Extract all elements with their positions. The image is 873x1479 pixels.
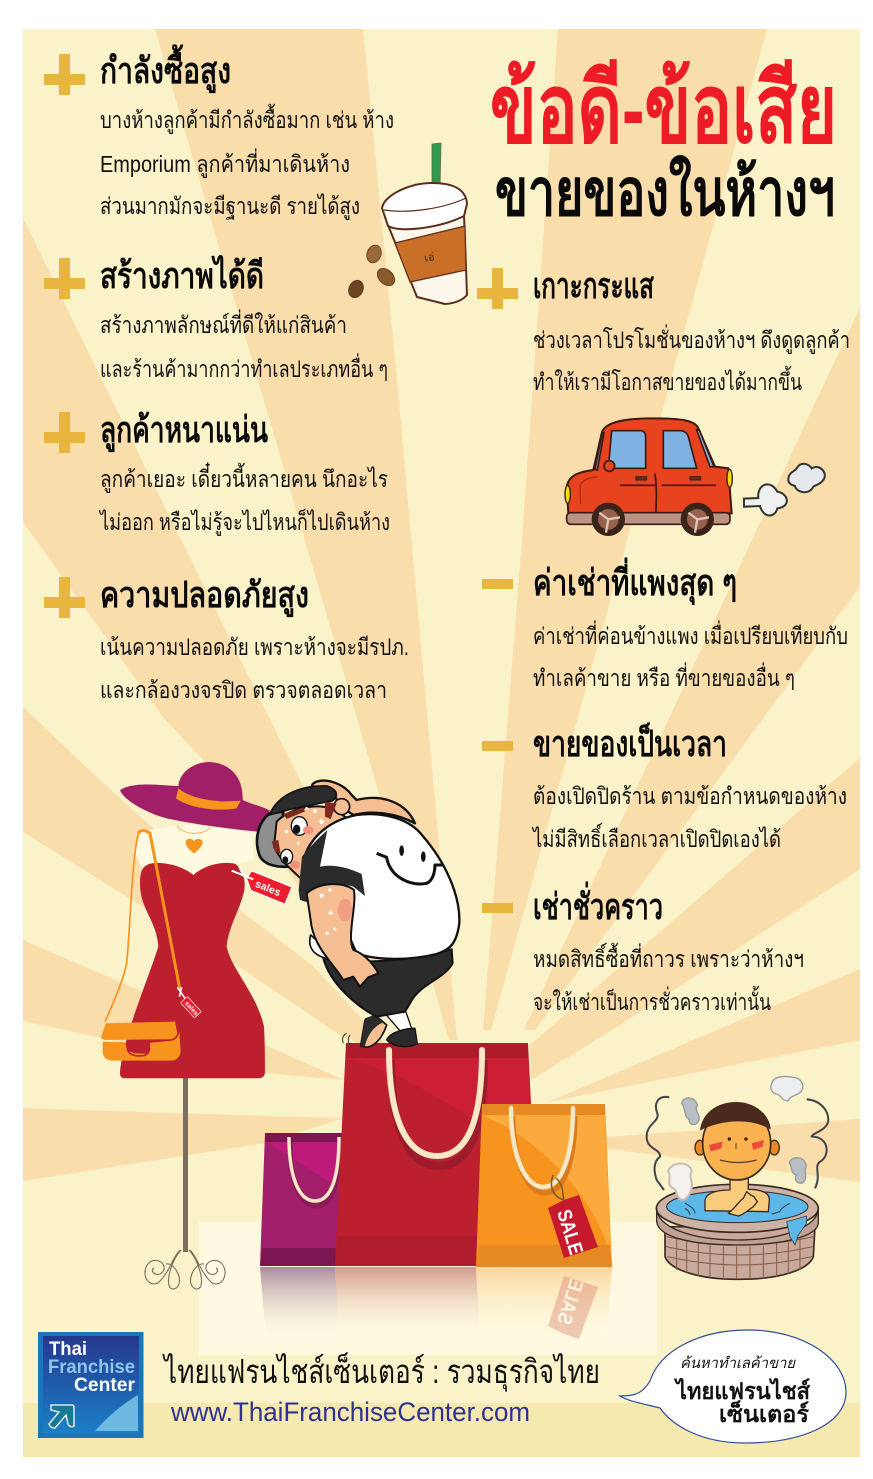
shirt sleeve trim — [299, 830, 365, 903]
orange bag — [476, 1104, 612, 1267]
heading 4: ความปลอดภัยสูง — [100, 574, 309, 618]
cap back — [257, 812, 287, 867]
bag strap — [105, 831, 180, 1022]
heading 7: ขายของเป็นเวลา — [533, 721, 727, 764]
body 3 — [98, 462, 390, 536]
tub basket — [665, 1227, 815, 1279]
steam clouds — [682, 1076, 806, 1183]
website url: www.ThaiFranchiseCenter.com — [170, 1397, 530, 1427]
body 4 — [100, 634, 409, 703]
pants — [323, 949, 453, 1017]
minus icon 2 — [482, 741, 513, 751]
handbag — [101, 1022, 181, 1061]
footer text — [162, 1352, 600, 1427]
water — [667, 1191, 808, 1223]
body 3: ลูกค้าเยอะ เดี๋ยวนี้หลายคน นึกอะไร — [100, 462, 388, 493]
body 2: และร้านค้ามากกว่าทำเลประเภทอื่น ๆ — [100, 353, 388, 382]
logo text — [48, 1339, 136, 1396]
body 8: จะให้เช่าเป็นการชั่วคราวเท่านั้น — [533, 986, 771, 1015]
heading 5: เกาะกระแส — [533, 265, 654, 306]
heading 2: สร้างภาพได้ดี — [100, 254, 264, 296]
title — [490, 56, 837, 229]
head — [703, 1107, 771, 1180]
icon: coffee cup and beans — [346, 143, 467, 304]
icon: boy in bathtub with steam — [647, 1076, 828, 1279]
logo arrow — [49, 1405, 74, 1428]
big red bag — [335, 1043, 540, 1266]
body 7 — [531, 783, 847, 852]
callout text: ค้นหาทำเลค้าขาย — [680, 1355, 796, 1372]
plus icon 4 — [44, 577, 85, 618]
body 4: และกล้องวงจรปิด ตรวจตลอดเวลา — [100, 677, 387, 703]
mannequin neck — [135, 825, 253, 875]
heading 6: ค่าเช่าที่แพงสุด ๆ — [533, 557, 737, 606]
plus icon 1 — [44, 54, 85, 95]
body 8: หมดสิทธิ์ซื้อที่ถาวร เพราะว่าห้างฯ — [533, 942, 804, 972]
icon: red car with exhaust — [565, 418, 825, 536]
bag reflections: SALE — [552, 1277, 587, 1327]
body 2 — [100, 309, 388, 382]
ear and hair — [272, 799, 350, 854]
ears — [695, 1140, 779, 1155]
heading 1: กำลังซื้อสูง — [100, 44, 231, 94]
plus icon 5 — [477, 268, 518, 309]
heading 8: เช่าชั่วคราว — [533, 881, 663, 927]
body 1: ส่วนมากมักจะมีฐานะดี รายได้สูง — [100, 193, 360, 220]
hat — [120, 762, 270, 832]
body 6: ทำเลค้าขาย หรือ ที่ขายของอื่น ๆ — [533, 662, 795, 691]
cap top — [269, 786, 336, 815]
arm — [307, 884, 378, 987]
legs and shoes — [343, 1009, 417, 1047]
eyes — [281, 807, 324, 869]
large sales tag — [243, 870, 292, 904]
necklace heart — [177, 825, 211, 854]
heading 3: ลูกค้าหนาแน่น — [100, 409, 268, 453]
small sales tag: sales — [183, 1000, 200, 1017]
towel — [787, 1216, 807, 1245]
icon: coffee cup and beans: เอ่ — [423, 251, 436, 265]
large sales tag: sales — [253, 878, 282, 899]
hair — [700, 1102, 771, 1131]
pole and stand — [145, 1076, 225, 1289]
front steam — [668, 1164, 692, 1200]
minus icon 3 — [482, 903, 513, 913]
pros left column — [44, 44, 409, 703]
cartoon man leaning — [257, 781, 459, 1047]
footer heading: ไทยแฟรนไชส์เซ็นเตอร์ : รวมธุรกิจไทย — [162, 1352, 600, 1392]
mannequin with dress, hat and bag — [101, 762, 292, 1289]
ripples — [685, 1203, 790, 1215]
sale tag — [548, 1175, 598, 1258]
body 1 — [100, 104, 394, 220]
callout text — [673, 1355, 811, 1427]
footer band — [23, 1403, 860, 1457]
steam lines — [647, 1097, 828, 1190]
callout bubble — [620, 1330, 846, 1443]
body 1: Emporium ลูกค้าที่มาเดินห้าง — [100, 148, 350, 178]
body 3: ไม่ออก หรือไม่รู้จะไปไหนก็ไปเดินห้าง — [98, 507, 390, 536]
dress — [120, 863, 265, 1078]
bag reflections — [260, 1267, 612, 1340]
shirt — [303, 814, 459, 959]
minus icon 1 — [482, 579, 513, 589]
face features — [709, 1137, 764, 1162]
body 1: บางห้างลูกค้ามีกำลังซื้อมาก เช่น ห้าง — [100, 104, 394, 134]
tub rim — [656, 1184, 818, 1232]
callout text: ไทยแฟรนไชส์ — [673, 1377, 811, 1404]
floor panel — [199, 1222, 657, 1355]
purple bag — [260, 1133, 345, 1266]
chest and hand — [705, 1177, 769, 1216]
body 5 — [533, 324, 850, 395]
raised arm and hand — [312, 781, 415, 823]
plus icon 2 — [44, 258, 85, 299]
body 2: สร้างภาพลักษณ์ที่ดีให้แก่สินค้า — [100, 309, 347, 338]
smiley print — [377, 845, 443, 884]
body 7: ไม่มีสิทธิ์เลือกเวลาเปิดปิดเองได้ — [531, 822, 781, 852]
small sales tag — [181, 996, 201, 1018]
right column items — [477, 265, 850, 1015]
face — [274, 806, 347, 878]
logo text: Thai — [49, 1339, 87, 1360]
sale tag: SALE — [552, 1207, 587, 1257]
body 6 — [533, 620, 848, 691]
footer logo — [38, 1332, 144, 1438]
plus icon 3 — [44, 412, 85, 453]
logo text: Center — [74, 1375, 136, 1396]
shirt hem — [310, 935, 330, 959]
logo text: Franchise — [48, 1357, 135, 1378]
body 8 — [533, 942, 804, 1015]
shopping bags — [260, 1043, 612, 1340]
callout text: เซ็นเตอร์ — [719, 1399, 810, 1427]
logo sail graphic — [95, 1395, 138, 1431]
body 4: เน้นความปลอดภัย เพราะห้างจะมีรปภ. — [100, 634, 409, 660]
